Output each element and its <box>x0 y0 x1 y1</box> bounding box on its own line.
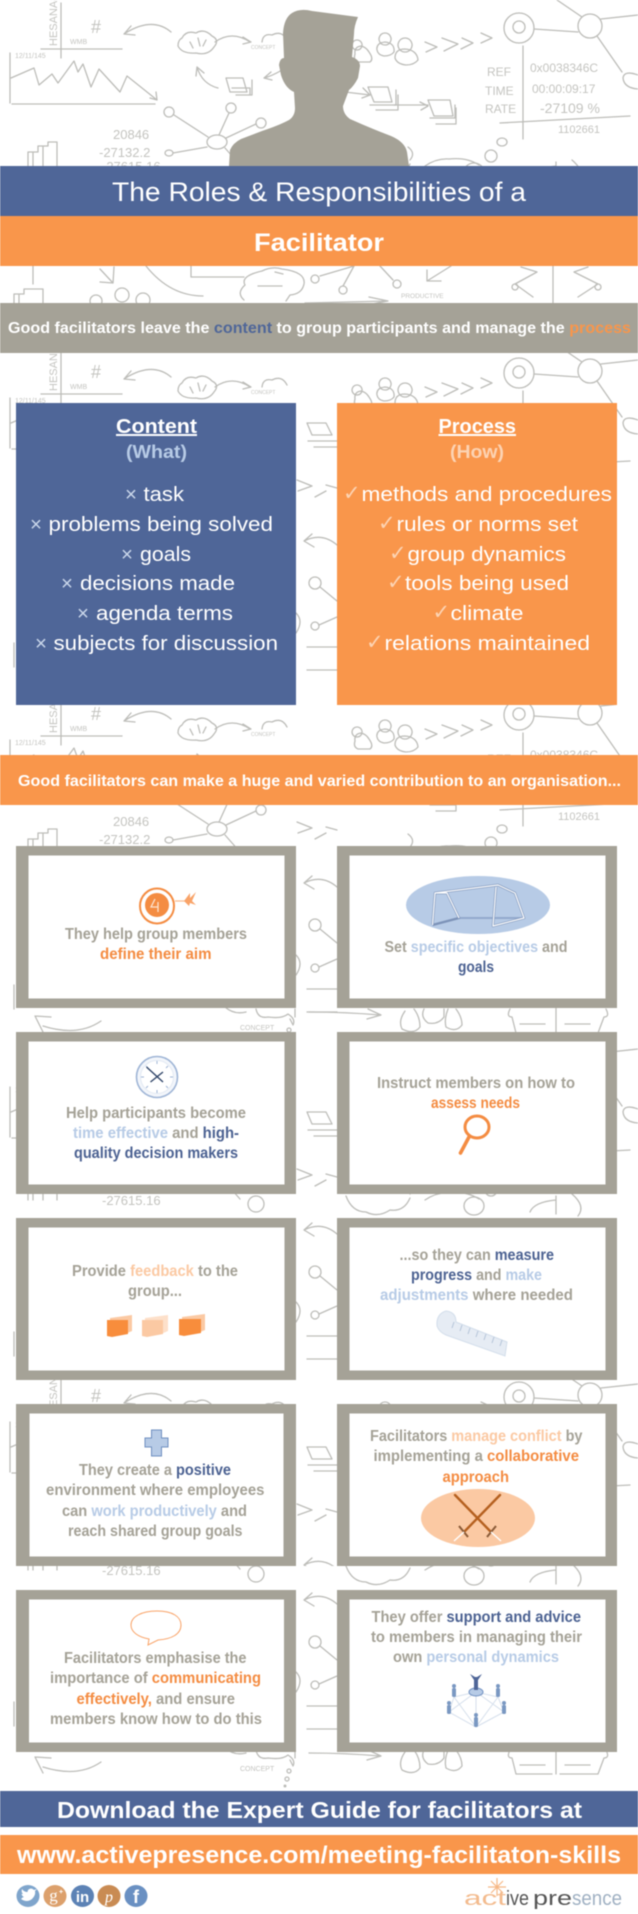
logo star <box>488 1878 506 1896</box>
card: define their aim <box>16 846 296 1008</box>
icon: crossed swords <box>421 1489 535 1547</box>
title band: blue <box>0 166 638 216</box>
card text: assess needs <box>431 1095 520 1112</box>
content list: × <box>77 602 89 625</box>
process list: rules or norms set <box>396 513 578 536</box>
card text: Facilitators manage conflict by <box>370 1428 583 1445</box>
process list: ✓ <box>343 481 361 505</box>
social icons <box>16 1885 148 1907</box>
card text: ...so they can measure <box>400 1247 554 1264</box>
card text: define their aim <box>100 946 212 963</box>
title band: orange <box>0 216 638 266</box>
card text: to members in managing their <box>371 1629 582 1646</box>
card text <box>65 926 247 963</box>
process list: ✓ <box>387 570 405 594</box>
content list: × <box>35 632 47 655</box>
card text <box>50 1650 262 1728</box>
card text: They offer support and advice <box>372 1609 581 1626</box>
card: set objectives <box>337 846 617 1008</box>
card text <box>370 1428 583 1486</box>
process list: ✓ <box>366 630 384 654</box>
card: measure progress <box>337 1218 617 1380</box>
process list: methods and procedures <box>362 483 612 506</box>
card text <box>371 1609 582 1666</box>
icon: target and arrow <box>140 888 196 924</box>
icon: facebook: f <box>133 1887 140 1907</box>
content list: task <box>144 483 185 506</box>
content list: goals <box>140 543 191 566</box>
card: assess needs <box>337 1032 617 1194</box>
card text: own personal dynamics <box>393 1649 559 1666</box>
footer band: blue <box>0 1791 638 1827</box>
card: feedback <box>16 1218 296 1380</box>
background: sketch strip between card rows 1 and 2 <box>35 1007 608 1033</box>
process heading: Process <box>438 416 516 438</box>
process list: relations maintained <box>384 632 590 655</box>
card: manage conflict <box>337 1404 617 1566</box>
background: sketches behind panels <box>8 352 638 672</box>
content list: × <box>121 543 133 566</box>
logo wordmark <box>464 1888 622 1910</box>
panel: content <box>16 403 296 705</box>
background: sketches behind first card row <box>8 704 620 1014</box>
icon: three blocks <box>107 1314 205 1337</box>
content list: agenda terms <box>96 602 233 625</box>
logo: active presence <box>464 1878 622 1910</box>
footer band: orange <box>0 1835 638 1874</box>
card text: group... <box>128 1283 182 1300</box>
card text <box>66 1105 246 1162</box>
card text: reach shared group goals <box>68 1523 242 1540</box>
title line 2: Facilitator <box>254 229 384 257</box>
process list: ✓ <box>389 541 407 565</box>
icon: goal net on blue ellipse <box>406 876 550 934</box>
icon: pinterest: p <box>104 1889 113 1906</box>
grey statement band <box>0 303 638 353</box>
card: decision makers <box>16 1032 296 1194</box>
icon: measuring tape <box>437 1311 507 1356</box>
content list <box>30 483 278 655</box>
process list: group dynamics <box>408 543 566 566</box>
content list: × <box>30 513 42 536</box>
card text: Help participants become <box>66 1105 246 1122</box>
card text <box>380 1247 573 1304</box>
icon: plus <box>145 1430 168 1456</box>
card text: Provide feedback to the <box>72 1263 238 1280</box>
background: sketches behind fifth card row <box>12 1566 582 1730</box>
card text: Set specific objectives and <box>384 939 568 956</box>
background: sketches under header: PRODUCTIVE <box>401 293 444 300</box>
orange statement band <box>0 755 638 805</box>
icon: clock <box>136 1056 178 1098</box>
title line 1: The Roles & Responsibilities of a <box>112 177 527 207</box>
card text: They help group members <box>65 926 247 943</box>
background: sketches under header <box>14 266 601 307</box>
icon: magnifying glass <box>460 1116 489 1153</box>
url text: www.activepresence.com/meeting-facilitaton-skills <box>16 1842 621 1869</box>
download text: Download the Expert Guide for facilitators at <box>57 1797 582 1823</box>
card text: effectively, and ensure <box>76 1691 235 1708</box>
process subheading: (How) <box>450 442 504 462</box>
statement text: Good facilitators can make a huge and varied contribution to an organisation... <box>18 773 621 790</box>
card text <box>377 1075 575 1112</box>
icon: twitter <box>16 1885 40 1907</box>
content list: subjects for discussion <box>54 632 278 655</box>
card text: implementing a collaborative <box>374 1448 579 1465</box>
card text: importance of communicating <box>50 1670 261 1687</box>
card text: members know how to do this <box>50 1711 262 1728</box>
statement text: Good facilitators leave the content to group participants and manage the process <box>8 320 631 337</box>
logo wordmark: act <box>464 1888 507 1910</box>
content list: problems being solved <box>48 513 273 536</box>
card text <box>46 1462 264 1540</box>
process list <box>343 481 612 655</box>
card text: Instruct members on how to <box>377 1075 575 1092</box>
icon: google plus <box>44 1885 66 1907</box>
card: positive environment <box>16 1404 296 1566</box>
card text: goals <box>458 959 494 976</box>
logo wordmark: ive <box>506 1888 529 1910</box>
background: sketches behind fourth card row <box>8 1380 638 1566</box>
process list: ✓ <box>378 511 396 535</box>
icon: linkedin: in <box>76 1889 89 1906</box>
content subheading: (What) <box>126 442 187 462</box>
card: support and advice <box>337 1590 617 1752</box>
card text: can work productively and <box>62 1503 247 1520</box>
card text: quality decision makers <box>74 1145 238 1162</box>
background: sketches behind second and third card rows <box>8 1048 638 1360</box>
background: sketch strip above footer <box>35 1748 608 1788</box>
content heading: Content <box>116 416 197 438</box>
card text: adjustments where needed <box>380 1287 573 1304</box>
logo wordmark: sence <box>572 1888 622 1910</box>
icon: speech bubble <box>131 1611 181 1645</box>
card text: Facilitators emphasise the <box>64 1650 247 1667</box>
icon: google plus: + <box>59 1889 63 1896</box>
icon: google plus: g <box>49 1886 58 1905</box>
panel: process <box>337 403 617 705</box>
content list: × <box>125 483 137 506</box>
card text: approach <box>442 1469 509 1486</box>
card text: time effective and high- <box>73 1125 239 1142</box>
icon: silhouette of a person <box>229 10 409 166</box>
background: top sketch band <box>8 0 638 166</box>
icon: network of people <box>447 1674 506 1727</box>
card: communicating effectively <box>16 1590 296 1752</box>
card text <box>72 1263 238 1300</box>
process list: climate <box>450 602 524 625</box>
process list: ✓ <box>432 600 450 624</box>
content list: decisions made <box>80 572 235 595</box>
logo wordmark: pre <box>533 1888 572 1910</box>
card text: environment where employees <box>46 1482 264 1499</box>
process list: tools being used <box>405 572 569 595</box>
card text: They create a positive <box>79 1462 231 1479</box>
content list: × <box>61 572 73 595</box>
card text: progress and make <box>411 1267 542 1284</box>
card text <box>384 939 568 976</box>
